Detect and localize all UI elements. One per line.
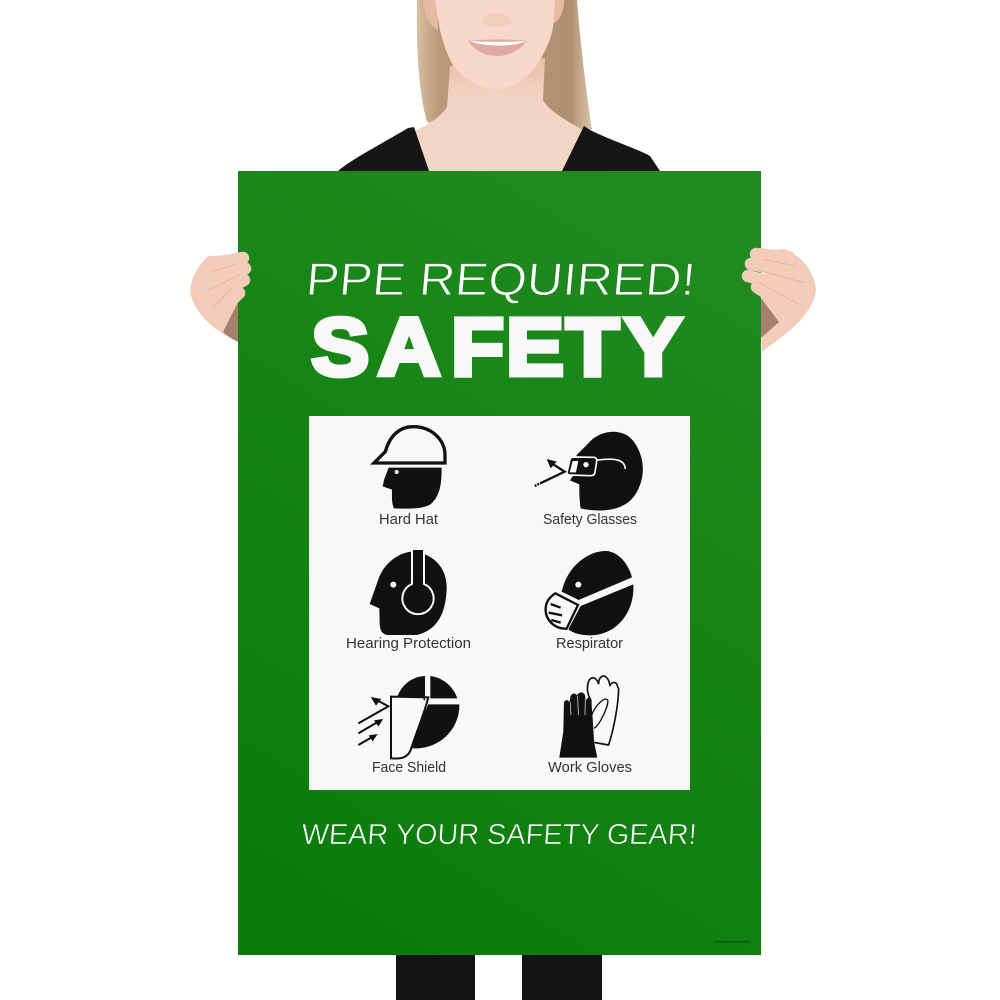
ears [423, 0, 564, 30]
right hand [748, 249, 816, 352]
legs [396, 950, 602, 1000]
mouth [468, 40, 527, 56]
label: respirator: Respirator [556, 636, 623, 652]
shirt [338, 126, 660, 171]
icon: safety glasses [535, 432, 643, 510]
poster background [238, 171, 761, 955]
label: hearing protection: Hearing Protection [346, 636, 471, 652]
icon: face shield [358, 676, 459, 759]
poster [238, 171, 761, 955]
finger creases [207, 264, 240, 308]
label: hard hat: Hard Hat [379, 512, 438, 528]
palm [762, 249, 816, 352]
face [435, 0, 555, 89]
label: face shield: Face Shield [372, 760, 446, 776]
icon: work gloves [559, 676, 619, 758]
panel: PPE icons [309, 416, 690, 790]
model holding the poster [338, 0, 660, 1000]
heading: PPE required: PPE REQUIRED! [304, 253, 698, 305]
fingers [748, 254, 805, 312]
icon: hearing protection [370, 550, 447, 635]
label: work gloves: Work Gloves [548, 760, 632, 776]
fingers [202, 258, 245, 318]
panel background [309, 416, 690, 790]
label: safety glasses: Safety Glasses [543, 512, 637, 528]
footer slogan: WEAR YOUR SAFETY GEAR! [301, 819, 698, 851]
heading: safety: SAFETY [311, 301, 682, 392]
hair [417, 0, 592, 130]
icon: respirator [546, 551, 633, 635]
nose [481, 13, 512, 27]
palm shadow [223, 302, 238, 342]
neck and chest [413, 58, 583, 172]
finger creases [758, 259, 805, 304]
small credit mark [714, 941, 750, 942]
left hand [190, 255, 245, 342]
palm [190, 255, 238, 342]
icon: hard hat [374, 427, 445, 509]
palm shadow [761, 298, 779, 338]
